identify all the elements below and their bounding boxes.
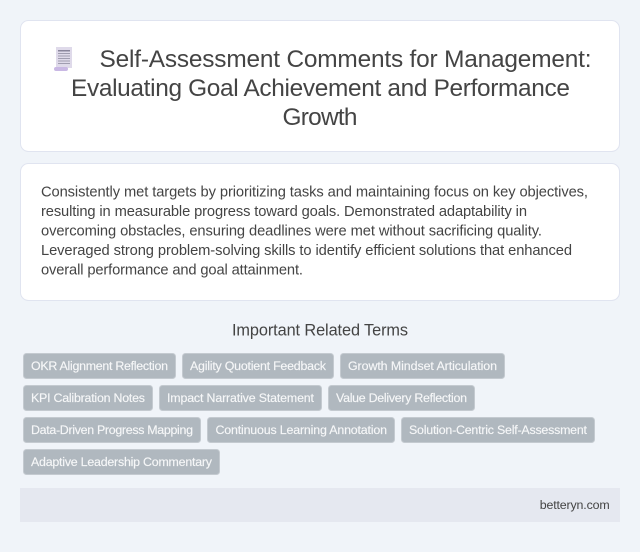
summary text: Consistently met targets by prioritizing tasks and maintaining focus on key objectives, — [41, 184, 588, 200]
tag: Impact — [160, 386, 322, 410]
tag: Solution — [402, 418, 594, 442]
tag: Data — [24, 418, 200, 442]
tag: KPI: KPI Calibration Notes — [31, 391, 145, 405]
tag: Agility — [182, 354, 334, 378]
tag: Continuous: Continuous Learning Annotation — [216, 423, 387, 437]
summary text: overall performance and goal attainment. — [41, 263, 303, 279]
tag: Continuous — [208, 418, 394, 442]
footer brand: betteryn.com — [540, 498, 610, 512]
tag: Solution: Solution-Centric Self-Assessment — [409, 423, 588, 437]
tag: Adaptive — [24, 450, 220, 474]
tag: OKR — [24, 354, 176, 378]
summary text: overcoming obstacles, ensuring deadlines were met without sacrificing quality. — [41, 224, 542, 240]
title: Self-Assessment Comments for Management: — [100, 46, 592, 73]
panel: title card — [20, 20, 620, 152]
tag: Value: Value Delivery Reflection — [336, 391, 467, 405]
tag: Growth — [340, 354, 504, 378]
tag: Data: Data-Driven Progress Mapping — [31, 423, 193, 437]
summary text: Leveraged strong problem-solving skills to identify efficient solutions that enhanced — [41, 243, 572, 259]
heading: related terms: Important Related Terms — [232, 322, 408, 340]
tag: Agility: Agility Quotient Feedback — [190, 359, 327, 373]
tag: Value — [328, 386, 474, 410]
title: Growth — [282, 104, 358, 131]
title: Evaluating Goal Achievement and Performance — [71, 75, 570, 102]
tag: OKR: OKR Alignment Reflection — [31, 359, 168, 373]
tag: Adaptive: Adaptive Leadership Commentary — [31, 455, 213, 469]
footer — [20, 488, 620, 522]
icon: scroll — [54, 47, 72, 71]
panel: summary card — [20, 164, 620, 300]
tag: Impact: Impact Narrative Statement — [167, 391, 315, 405]
tag list — [24, 354, 594, 474]
title — [71, 46, 592, 131]
tag: KPI — [24, 386, 152, 410]
summary text: resulting in measurable progress toward goals. Demonstrated adaptability in — [41, 204, 527, 220]
summary text — [41, 184, 588, 279]
tag: Growth: Growth Mindset Articulation — [348, 359, 497, 373]
